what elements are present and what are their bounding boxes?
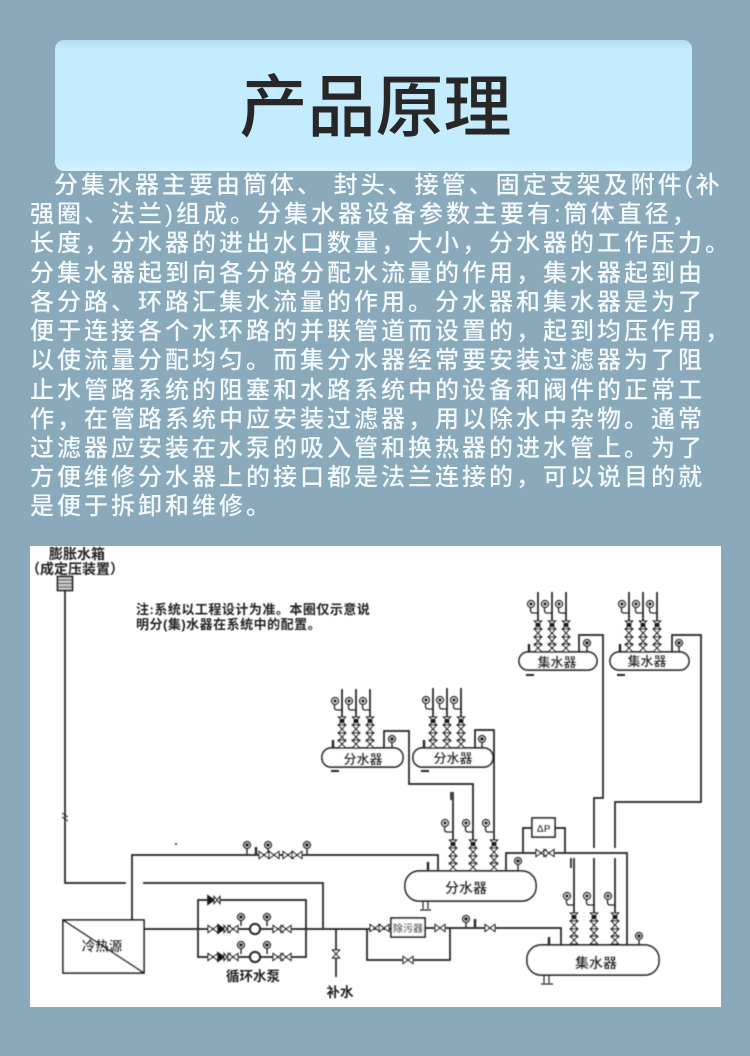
make-up water pipe [332, 929, 340, 977]
expansion tank label: 膨胀水箱 [49, 546, 105, 562]
text block: principle description: 各分路、环路汇集水流量的作用。分水器和集水器是为了 [30, 289, 705, 316]
text block: principle description: 长度，分水器的进出水口数量，大小，分水器的工作压力。 [30, 230, 732, 257]
text block: principle description: 方便维修分水器上的接口都是法兰连接的，可以说目的就 [30, 464, 705, 491]
large distributor [384, 730, 627, 946]
upper pipe fittings [244, 842, 310, 858]
large distributor: 分水器 [445, 880, 487, 896]
large distributor: ΔP [537, 824, 551, 835]
expansion pipe with break mark [65, 591, 323, 928]
note text [136, 602, 370, 632]
note text: 明分(集)水器在系统中的配置。 [136, 617, 321, 632]
small distributor A: 分水器 [343, 752, 383, 767]
small distributor B [413, 688, 493, 771]
title: 产品原理 [239, 70, 512, 146]
filter and valves: 除污器 [393, 922, 423, 935]
text block: principle description: 是便于拆卸和维修。 [30, 493, 273, 520]
small collector C [519, 592, 597, 675]
small distributor B: 分水器 [433, 751, 473, 766]
small collector C: 集水器 [537, 655, 577, 670]
text block: principle description: 便于连接各个水环路的并联管道而设置的，起到均压作用， [30, 318, 732, 345]
filter and valves [370, 916, 495, 964]
note text: 注:系统以工程设计为准。本圈仅示意说 [136, 602, 370, 617]
small collector D: 集水器 [627, 654, 667, 669]
text block: principle description: 分集水器起到向各分路分配水流量的作用，集水器起到由 [30, 260, 705, 287]
text block: principle description: 过滤器应安装在水泵的吸入管和换热器的进水管上。为了 [30, 435, 705, 462]
text block: principle description: 以使流量分配均匀。而集分水器经常要安装过滤器为了阻 [30, 347, 705, 374]
heat source box [63, 920, 144, 973]
large collector: 集水器 [575, 955, 617, 971]
make-up water label: 补水 [326, 984, 354, 1000]
heat source box: 冷热源 [82, 938, 123, 954]
diagram contents [26, 546, 701, 1000]
small distributor A [322, 689, 403, 771]
pump loop [198, 896, 306, 962]
icon: expansion tank [58, 576, 72, 590]
text block: principle description: 止水管路系统的阻塞和水路系统中的设备和阀件的正常工 [30, 377, 705, 404]
diagram panel background [30, 546, 721, 1007]
supply pipe upper [62, 813, 438, 920]
text block: principle description: 作，在管路系统中应安装过滤器，用以除水中杂物。通常 [30, 406, 705, 433]
large collector [527, 635, 701, 984]
expansion tank label: （成定压装置） [26, 561, 124, 577]
main return pipe [144, 928, 561, 960]
text block: principle description [30, 172, 732, 520]
text block: principle description: 分集水器主要由筒体、 封头、接管、固定支架及附件(补 [54, 172, 723, 199]
expansion tank label [26, 546, 124, 577]
title banner [55, 40, 692, 171]
pump label: 循环水泵 [226, 968, 280, 984]
text block: principle description: 强圈、法兰)组成。分集水器设备参数主要有:筒体直径， [30, 201, 699, 228]
small collector D [610, 592, 689, 675]
